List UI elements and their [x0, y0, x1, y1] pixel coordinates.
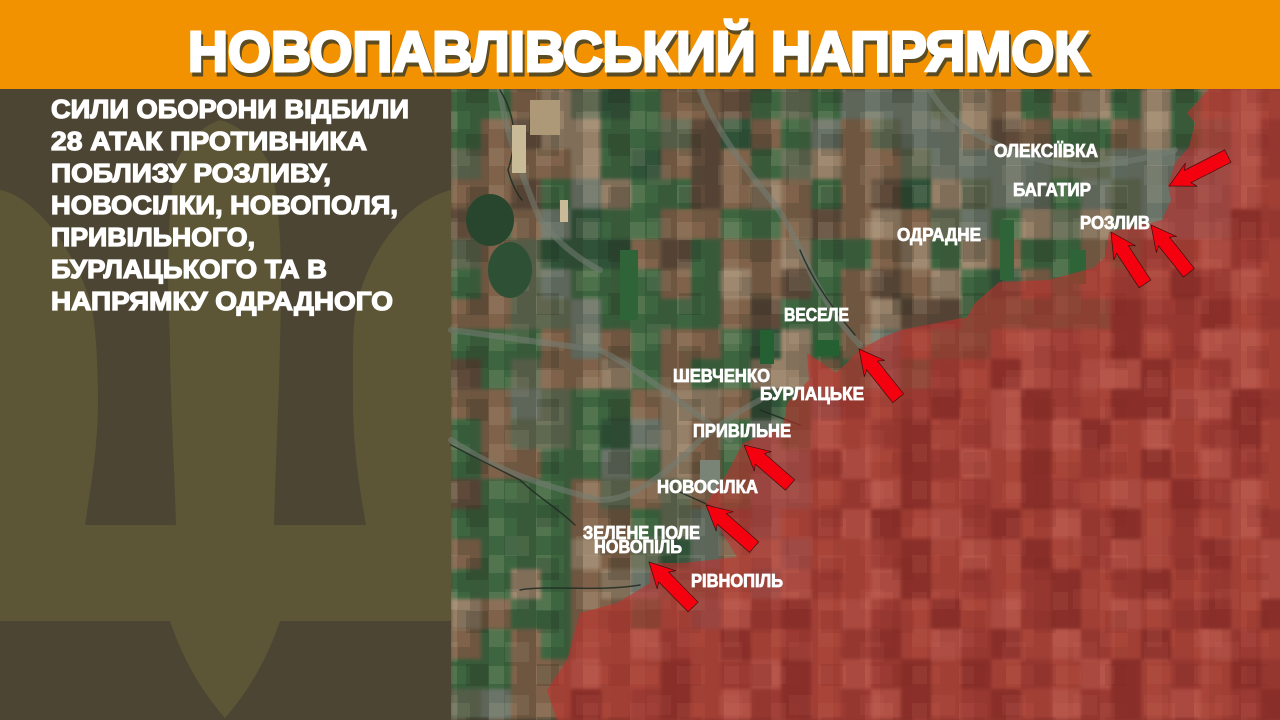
title: НОВОПАВЛІВСЬКИЙ НАПРЯМОК [188, 19, 1088, 84]
panel: left background with trident emblem [0, 120, 451, 718]
arrow: Privilne [735, 435, 799, 495]
arrow: Novopil [640, 553, 702, 616]
label: Shevchenko: ШЕВЧЕНКО [673, 366, 770, 386]
label: Bahatyr: БАГАТИР [1013, 180, 1091, 200]
text block: summary of repelled attacks: БУРЛАЦЬКОГО ТА В [51, 254, 327, 284]
arrow: Burlatske [849, 341, 908, 406]
label: Novosilka: НОВОСІЛКА [657, 477, 758, 497]
arrow: Novosilka [697, 495, 763, 557]
text block: summary of repelled attacks: ПОБЛИЗУ РОЗЛИВУ, [51, 158, 331, 188]
text block: summary of repelled attacks: СИЛИ ОБОРОНИ ВІДБИЛИ [51, 94, 409, 124]
label: Vesele: ВЕСЕЛЕ [784, 305, 849, 325]
text block: summary of repelled attacks: НАПРЯМКУ ОДРАДНОГО [51, 286, 393, 316]
label: Privilne: ПРИВІЛЬНЕ [693, 421, 791, 441]
text block: summary of repelled attacks: НОВОСІЛКИ, НОВОПОЛЯ, [51, 190, 398, 220]
label: Zelene Pole: ЗЕЛЕНЕ ПОЛЕ [583, 523, 700, 543]
text block: summary of repelled attacks: 28 АТАК ПРОТИВНИКА [51, 126, 367, 156]
label: Novopil: НОВОПІЛЬ [594, 537, 682, 557]
text block: summary of repelled attacks: ПРИВІЛЬНОГО, [51, 222, 255, 252]
label: Rozliv: РОЗЛИВ [1080, 213, 1150, 233]
header: orange title bar [0, 0, 1280, 89]
map: satellite field patchwork [451, 89, 1280, 720]
map labels: settlements [583, 141, 1150, 591]
text block: summary of repelled attacks [51, 94, 409, 316]
label: Oleksiivka: ОЛЕКСІЇВКА [994, 141, 1098, 161]
arrow: Rozliv south-east [1141, 217, 1199, 281]
label: Rivnopil: РІВНОПІЛЬ [691, 571, 783, 591]
label: Odradne: ОДРАДНЕ [897, 225, 981, 245]
arrows: red attack directions [640, 144, 1234, 616]
arrow: Rozliv east [1163, 144, 1234, 198]
arrow: Rozliv south [1100, 225, 1156, 291]
label: Burlatske: БУРЛАЦЬКЕ [760, 384, 864, 404]
